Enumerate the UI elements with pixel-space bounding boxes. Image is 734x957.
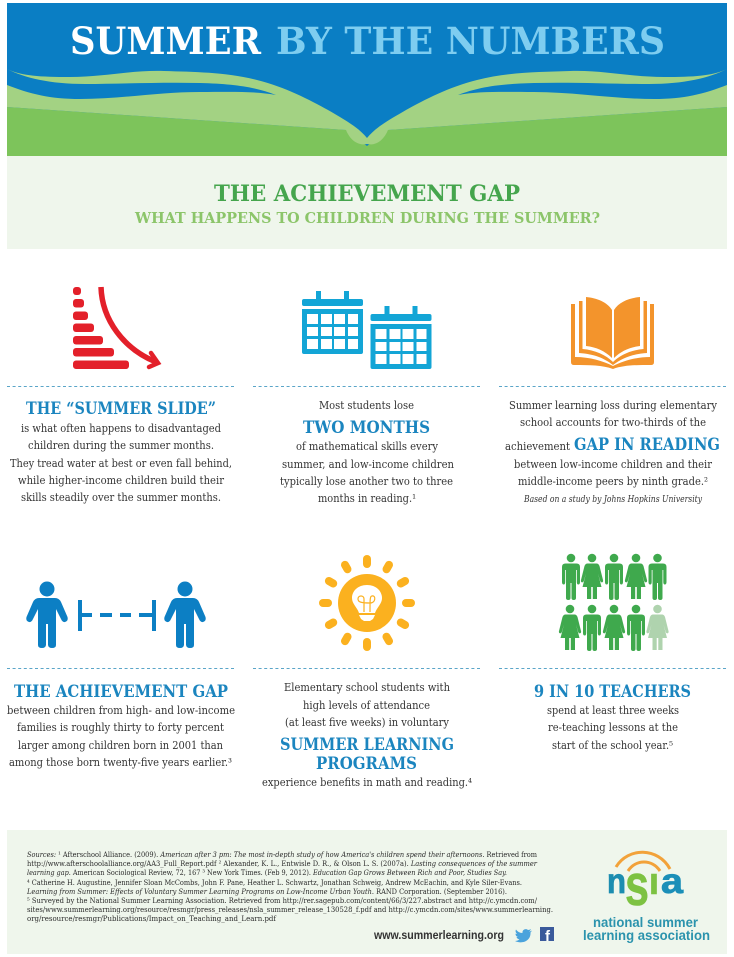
logo wordmark: national summer: [593, 914, 699, 930]
section heading panel: [7, 156, 727, 249]
body: summer slide: [10, 422, 232, 504]
logo letters: [607, 853, 684, 918]
section heading: THE ACHIEVEMENT GAP: [214, 181, 520, 207]
sources text: Learning from Summer: Effects of Voluntary Summer Learning Programs on Low-Income Urban Youth. RAND Corporation. (September 2016).: [26, 887, 507, 896]
body: reading intro: school accounts for two-thirds of the: [520, 416, 706, 429]
heading: summer learning programs: SUMMER LEARNING: [280, 735, 454, 755]
heading: summer learning programs: [280, 735, 454, 774]
sources text: ⁵ Surveyed by the National Summer Learning Association. Retrieved from http://rer.sagepub.com/content/66/3/227.abstract and http://c.ymcdn.com/: [27, 896, 537, 905]
body: summer slide: skills steadily over the summer months.: [21, 491, 221, 504]
icon: facebook: f: [545, 928, 551, 945]
heading: summer slide: THE “SUMMER SLIDE”: [26, 399, 216, 419]
panel: achievement gap: [7, 682, 235, 769]
sources text: sites/www.summerlearning.org/resource/resmgr/press_releases/nsla_summer_release_130528_f.pdf and http://c.ymcdn.com/sites/www.summerlearning.: [27, 905, 553, 914]
body: reading detail: middle-income peers by ninth grade.²: [518, 475, 708, 488]
panel: summer slide: [10, 399, 232, 504]
icon: calendars: [302, 291, 432, 369]
logo letters: n: [607, 862, 626, 901]
body: achievement gap: families is roughly thirty to forty percent: [17, 721, 224, 734]
logo wordmark: [583, 914, 710, 943]
panel: nine in ten teachers: [534, 682, 691, 752]
body: achievement gap: among those born twenty-five years earlier.³: [9, 756, 232, 769]
main title: [70, 19, 665, 63]
heading: summer learning programs: PROGRAMS: [316, 754, 417, 774]
body: summer slide: while higher-income children build their: [18, 474, 225, 487]
icon: two people with gap: [26, 582, 206, 648]
heading: 9 in 10 teachers: 9 IN 10 TEACHERS: [534, 682, 691, 702]
website url: www.summerlearning.org: [373, 930, 504, 942]
source note: Based on a study by Johns Hopkins University: [523, 495, 703, 505]
body: benefits: experience benefits in math and reading.⁴: [262, 776, 472, 789]
body: summer slide: is what often happens to disadvantaged: [21, 422, 221, 435]
icon: summer slide bars and arrow: [73, 287, 158, 369]
icon: nine in ten teachers: [559, 554, 669, 651]
body: attendance: Elementary school students with: [284, 681, 450, 694]
open book pages illustration: [7, 69, 727, 156]
section subheading: WHAT HAPPENS TO CHILDREN DURING THE SUMMER?: [134, 209, 600, 227]
panel: gap in reading: [505, 399, 720, 505]
logo letters: s: [625, 853, 649, 918]
logo wordmark: learning association: [583, 927, 710, 943]
body: teachers: spend at least three weeks: [547, 704, 679, 717]
header banner: [7, 3, 727, 156]
body: two months: typically lose another two to three: [280, 475, 453, 488]
body: two months: summer, and low-income children: [282, 458, 454, 471]
icon: open book: [571, 297, 654, 369]
body: teachers: [547, 704, 679, 752]
nsla logo: [583, 852, 710, 943]
body: reading intro: achievement: [505, 440, 570, 453]
icon: facebook: [540, 927, 554, 945]
main title: BY THE NUMBERS: [276, 19, 665, 63]
sources text: ⁴ Catherine H. Augustine, Jennifer Sloan McCombs, John F. Pane, Heather L. Schwartz, Jonathan Schweig, Andrew McEachin, and Kyle Siler-Evans.: [27, 878, 522, 887]
body: teachers: re-teaching lessons at the: [548, 721, 678, 734]
logo arcs: [616, 852, 670, 871]
icon: twitter: [515, 929, 532, 942]
text: most students lose: Most students lose: [319, 399, 414, 412]
sources text: http://www.afterschoolalliance.org/AA3_Full_Report.pdf ² Alexander, K. L., Entwisle D. R., & Olson L. S. (2007a). Lasting consequences of the summer: [27, 859, 537, 868]
logo letters: a: [661, 862, 684, 901]
main title: SUMMER: [70, 19, 261, 63]
body: achievement gap: larger among children born in 2001 than: [18, 739, 223, 752]
body: two months: months in reading.¹: [318, 492, 416, 505]
body: two months: of mathematical skills every: [296, 440, 439, 453]
sources text: org/resource/resmgr/Publications/Impact_on_Teaching_and_Learn.pdf: [27, 914, 277, 923]
panel: two months: [280, 399, 454, 505]
body: attendance: (at least five weeks) in voluntary: [285, 716, 450, 729]
body: achievement gap: between children from high- and low-income: [7, 704, 235, 717]
sources text: learning gap. American Sociological Review, 72, 167 ³ New York Times. (Feb 9, 2012). Education Gap Grows Between Rich and Poor, Studies Say.: [27, 868, 507, 877]
panel: summer learning programs: [262, 681, 472, 789]
body: attendance: [284, 681, 450, 729]
footer panel: [7, 830, 727, 954]
icon: light bulb sun: [319, 555, 415, 651]
body: attendance: high levels of attendance: [303, 699, 430, 712]
heading: two months: TWO MONTHS: [303, 418, 430, 438]
logo letters: l: [649, 869, 659, 900]
sources text: Sources: ¹ Afterschool Alliance. (2009). American after 3 pm: The most in-depth study of how America's children spend their afternoons. Retrieved from: [27, 850, 537, 859]
body: reading detail: [514, 458, 713, 488]
body: reading intro: [505, 399, 718, 453]
sources text: [26, 850, 553, 923]
body: two months: [280, 440, 454, 505]
body: summer slide: children during the summer months.: [28, 439, 214, 452]
body: teachers: start of the school year.⁵: [552, 739, 673, 752]
body: achievement gap: [7, 704, 235, 769]
body: reading detail: between low-income children and their: [514, 458, 713, 471]
body: summer slide: They tread water at best or even fall behind,: [10, 457, 232, 470]
heading: achievement gap: THE ACHIEVEMENT GAP: [14, 682, 228, 702]
